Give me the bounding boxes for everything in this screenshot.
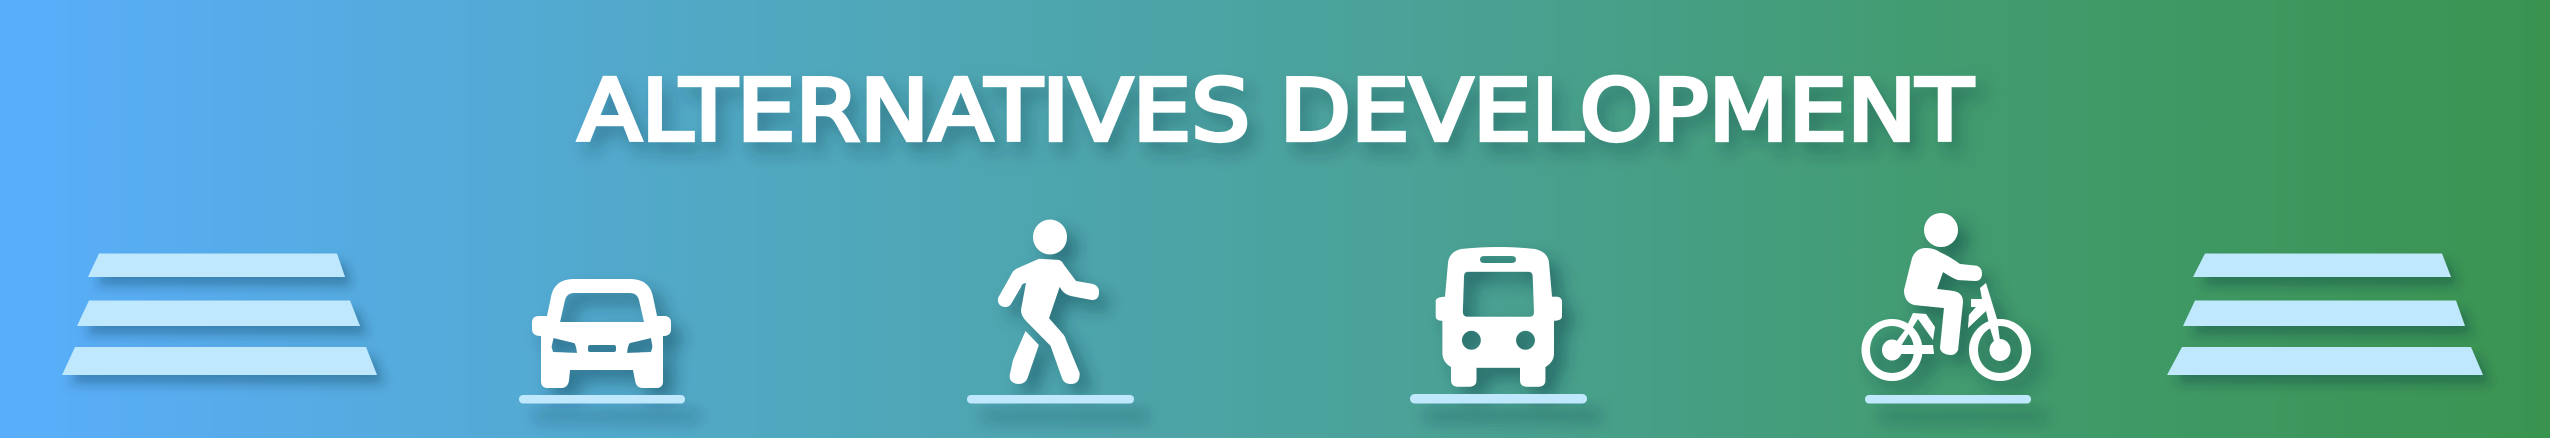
left crosswalk stripes [62,254,377,375]
icon: cyclist [1862,213,2031,381]
icon: bus [1436,247,1562,387]
icon: car [532,279,671,388]
bus road bar [1410,394,1587,404]
pedestrian road bar [967,395,1134,404]
right crosswalk stripes [2167,254,2483,375]
cyclist road bar [1865,395,2031,404]
icon: pedestrian [998,220,1099,384]
title: ALTERNATIVES DEVELOPMENT [578,62,1974,161]
car road bar [519,395,685,404]
